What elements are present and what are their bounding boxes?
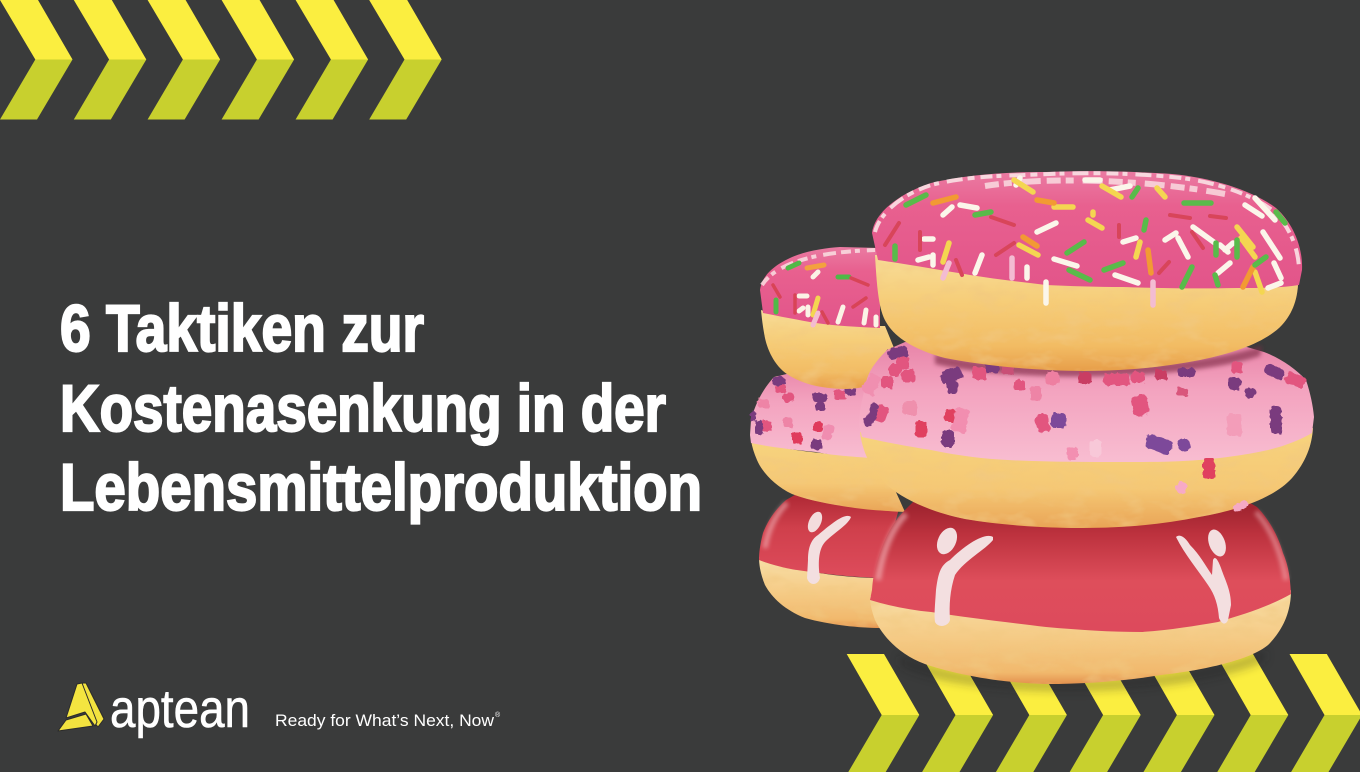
main title: [60, 291, 702, 524]
icon: Aptean triangle mark: [58, 683, 104, 731]
front stack: bottom red donut: [870, 500, 1291, 684]
glaze highlights: [878, 514, 906, 580]
donut photo: two stacks: [750, 171, 1314, 690]
sprinkled top rim: [875, 173, 1299, 268]
Aptean logo: [58, 679, 501, 739]
front stack: middle pink donut: [859, 342, 1314, 528]
back stack: top sprinkled donut: [760, 247, 905, 389]
pink crumbs: [861, 356, 1307, 514]
tagline: Ready for What’s Next, Now: [275, 712, 494, 730]
shadow under top donut: [935, 346, 1262, 377]
back stack: bottom red donut: [759, 492, 900, 628]
main title: Kostenasenkung in der: [60, 371, 666, 445]
front stack: top sprinkled donut: [872, 171, 1302, 371]
chevrons: lower olive halves: [0, 60, 442, 120]
bottom-right chevron band: [847, 654, 1360, 772]
chevrons: upper yellow halves: [0, 0, 442, 60]
registered mark: ®: [495, 711, 501, 719]
white icing drips: [933, 525, 1231, 626]
chevrons: upper yellow halves: [847, 654, 1360, 715]
sprinkles: [885, 178, 1285, 305]
main title: Lebensmittelproduktion: [60, 450, 702, 524]
cast shadow under donuts: [900, 650, 1265, 690]
purple crumbs: [863, 345, 1286, 456]
back stack: middle pink donut: [750, 365, 905, 512]
chevrons: lower olive halves: [848, 715, 1360, 772]
wordmark: aptean: [110, 679, 250, 739]
main title: 6 Taktiken zur: [60, 291, 424, 365]
top-left chevron band: [0, 0, 442, 120]
